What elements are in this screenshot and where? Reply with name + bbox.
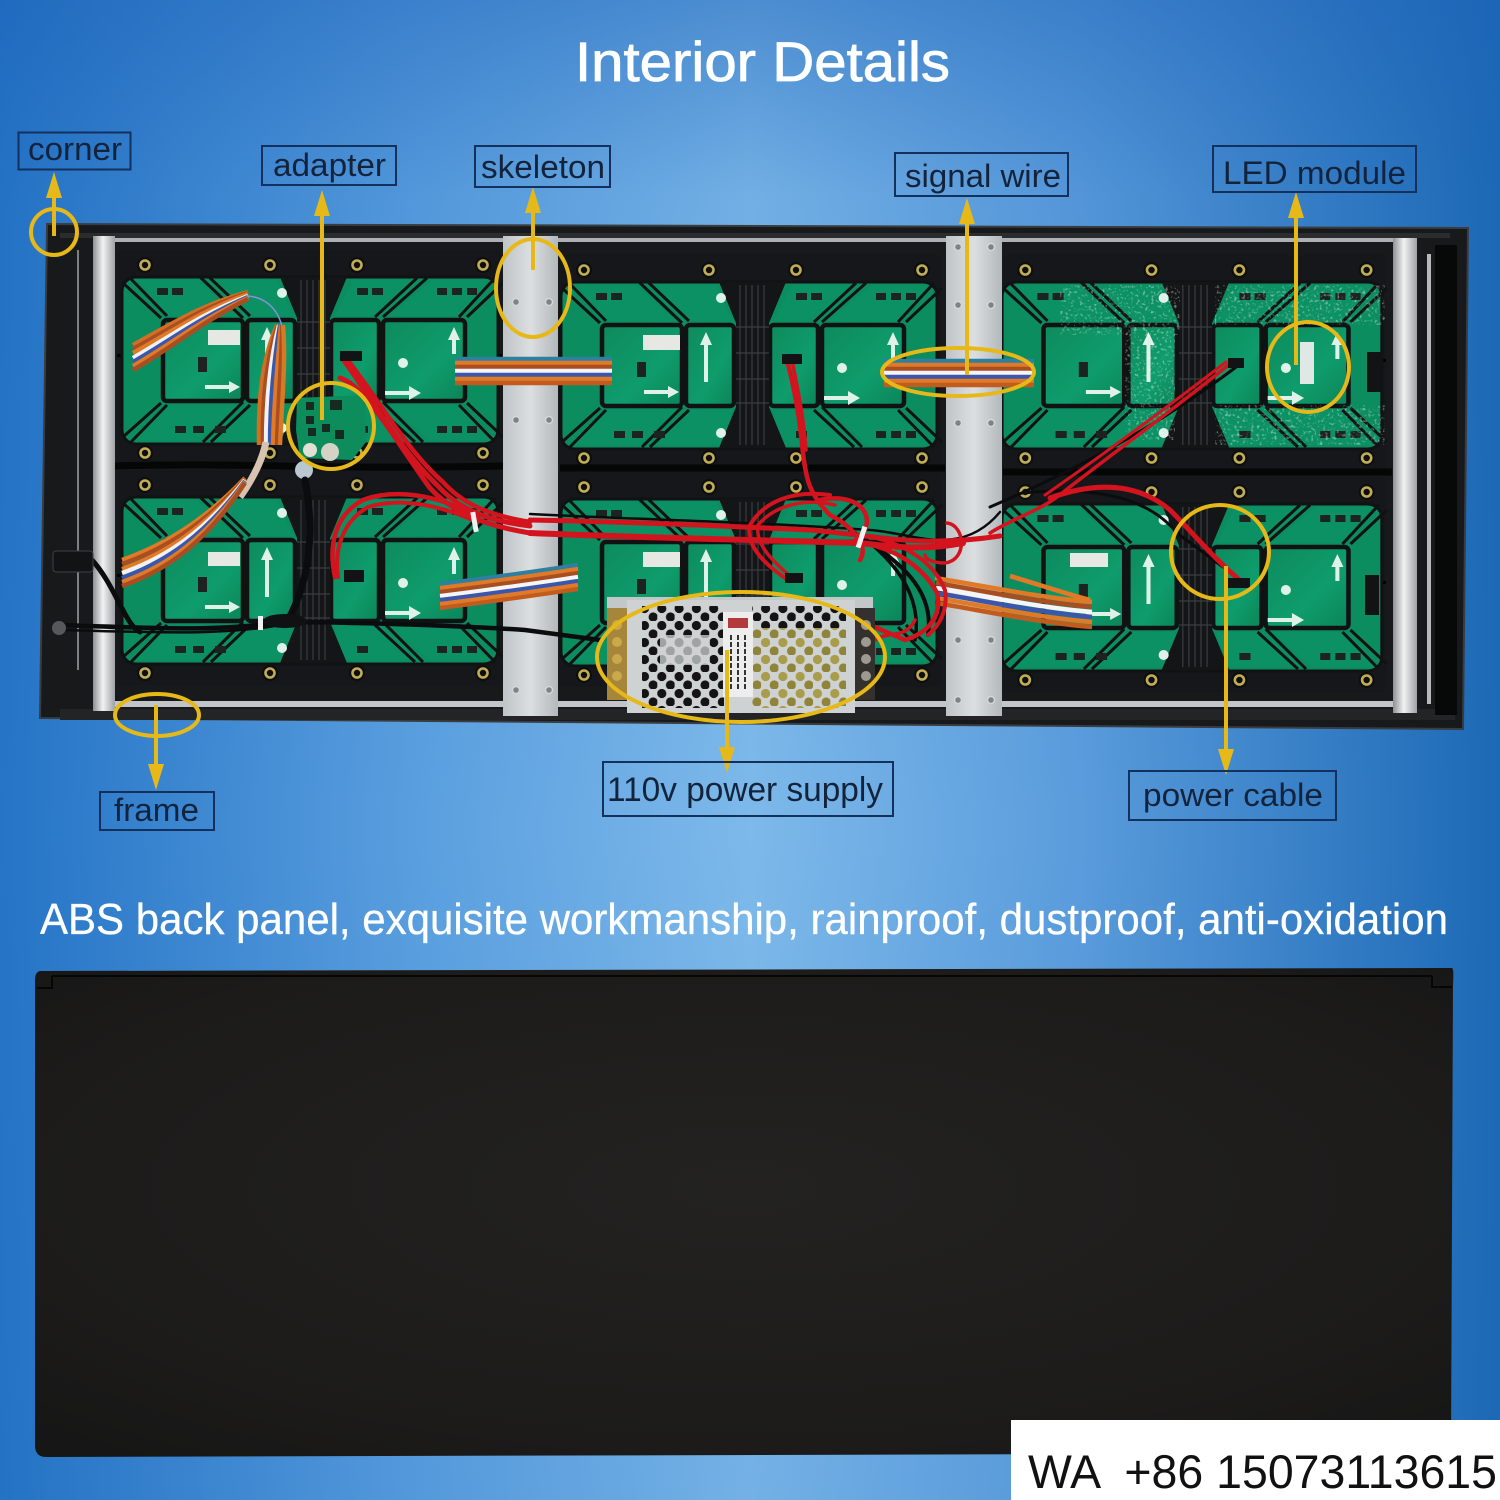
label: adapter: adapter: [273, 147, 386, 183]
black cables: [60, 364, 1240, 640]
ribbon lower right: [935, 576, 1092, 627]
power supply callout: [597, 592, 885, 773]
ribbon cables: [122, 292, 1092, 627]
ribbon skeleton upper: [455, 359, 612, 383]
label: signal wire: signal wire: [905, 158, 1061, 194]
yellow callouts: [31, 172, 1349, 790]
corner callout: [31, 172, 77, 255]
label: corner: corner: [28, 131, 122, 167]
label: 110v power supply: [603, 762, 893, 816]
signal wire callout: [882, 198, 1034, 396]
LED module callout: [1267, 192, 1349, 412]
adapter board: [295, 395, 366, 479]
left aluminium rail: [93, 236, 115, 711]
watermark contact box: [1011, 1420, 1500, 1500]
side rods: [77, 245, 1457, 715]
frame callout: [115, 694, 199, 790]
label: 110v power supply: 110v power supply: [607, 771, 883, 809]
label: skeleton: skeleton: [481, 149, 605, 185]
label: frame: [100, 792, 214, 830]
label: power cable: power cable: [1143, 777, 1323, 813]
cabinet body: [40, 224, 1468, 729]
oxidised speckle on right modules: [1060, 285, 1385, 445]
ribbon skeleton lower: [440, 565, 578, 608]
label: LED module: LED module: [1223, 155, 1406, 191]
ABS back panel: [35, 968, 1453, 1457]
connectors: [340, 351, 1381, 615]
ribbon lower-left: [122, 478, 245, 586]
adapter callout: [288, 190, 374, 469]
cable ties: [258, 512, 867, 630]
ribbon top-left: [133, 292, 283, 370]
power plug: [52, 551, 307, 635]
watermark contact box: WA +86 15073113615: [1028, 1445, 1497, 1498]
black tape between module rows: [115, 465, 1392, 472]
title: Interior Details: [575, 30, 950, 93]
right aluminium rail: [1393, 238, 1417, 713]
ribbon signal wire: [884, 361, 1034, 385]
LED modules grid: [117, 250, 1387, 692]
label: frame: frame: [114, 792, 199, 828]
label: LED module: [1213, 146, 1416, 192]
subheading: ABS back panel, exquisite workmanship, rainproof, dustproof, anti-oxidation: [40, 895, 1448, 944]
skeleton rail 1: [503, 236, 558, 716]
skeleton callout: [496, 187, 570, 337]
label: power cable: [1129, 771, 1336, 820]
top and bottom silver bars: [60, 233, 1455, 720]
ribbon middle vertical: [240, 325, 284, 497]
110v power supply unit: [607, 597, 875, 713]
module stickers: [208, 330, 1108, 567]
red power wires: [332, 358, 1243, 640]
skeleton rail 2: [946, 236, 1002, 716]
power cable callout: [1171, 505, 1269, 775]
LED cabinet interior photo: [40, 224, 1468, 729]
psu spec label: [723, 612, 753, 697]
